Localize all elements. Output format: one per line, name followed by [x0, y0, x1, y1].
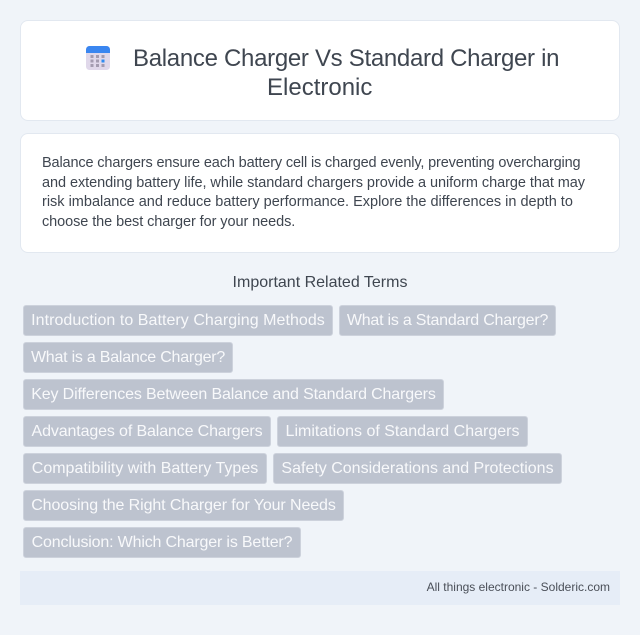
tag	[277, 416, 528, 447]
description text: Balance chargers ensure each battery cell is charged evenly, preventing overcharging	[42, 155, 580, 171]
description text	[42, 155, 585, 230]
icon: calendar	[86, 46, 110, 70]
description text: and extending battery life, while standard chargers provide a uniform charge that may	[42, 174, 585, 190]
tag: Choosing the Right Charger for Your Needs	[31, 497, 336, 514]
tag	[23, 490, 344, 521]
title: Balance Charger Vs Standard Charger in	[133, 45, 559, 72]
tag	[339, 305, 556, 336]
tag: Limitations of Standard Chargers	[286, 423, 519, 440]
tag: Compatibility with Battery Types	[32, 460, 258, 477]
tag: Introduction to Battery Charging Methods	[31, 312, 325, 329]
title: Electronic	[267, 74, 372, 101]
tag: What is a Standard Charger?	[347, 312, 548, 329]
description text: choose the best charger for your needs.	[42, 214, 295, 230]
header card	[20, 20, 620, 121]
tag	[23, 305, 333, 336]
tag: Conclusion: Which Charger is Better?	[32, 534, 292, 551]
related terms tags	[23, 305, 562, 558]
tag: Safety Considerations and Protections	[281, 460, 554, 477]
tag	[23, 416, 271, 447]
tag: What is a Balance Charger?	[31, 349, 225, 366]
related terms heading: Important Related Terms	[233, 274, 407, 291]
tag: Key Differences Between Balance and Standard Chargers	[31, 386, 436, 403]
tag	[273, 453, 562, 484]
title	[133, 45, 559, 101]
tag	[23, 527, 301, 558]
tag: Advantages of Balance Chargers	[32, 423, 262, 440]
footer text: All things electronic - Solderic.com	[427, 580, 610, 594]
tag	[23, 342, 233, 373]
tag	[23, 453, 267, 484]
footer bar	[20, 571, 620, 605]
description text: risk imbalance and reduce battery performance. Explore the differences in depth to	[42, 194, 573, 210]
tag	[23, 379, 444, 410]
description card	[20, 133, 620, 253]
